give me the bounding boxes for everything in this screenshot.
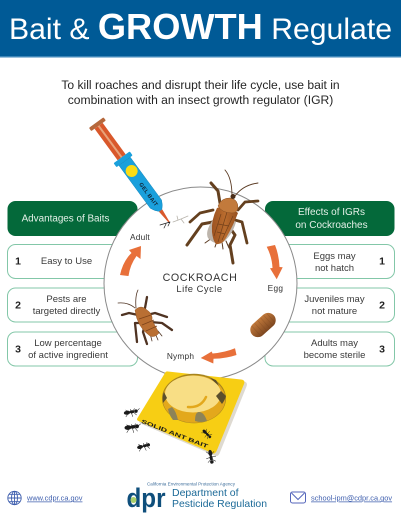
row: adults: Adults may <box>311 338 358 349</box>
heading: effects: on Cockroaches <box>295 220 368 231</box>
label: nymph: Nymph <box>167 351 194 361</box>
intro text: To kill roaches and disrupt their life cycle, use bait in <box>61 78 340 92</box>
row: pests targeted: 2 <box>15 300 21 312</box>
row: pests targeted <box>8 288 138 322</box>
row: low percentage: 3 <box>15 344 21 356</box>
row: eggs <box>265 244 394 278</box>
row: low percentage: Low percentage <box>34 338 102 349</box>
label: adult: Adult <box>130 232 150 242</box>
syringe label: GEL BAIT <box>137 182 159 208</box>
heading: effects: Effects of IGRs <box>298 207 365 218</box>
title: Bait & GROWTH Regulate <box>9 6 392 47</box>
bait label: SOLID ANT BAIT <box>140 419 210 450</box>
row: easy to use: 1 <box>15 256 21 268</box>
panel: effects of IGRs <box>265 201 394 366</box>
row: eggs: Eggs may <box>313 251 356 262</box>
row: low percentage <box>8 332 138 366</box>
header banner <box>0 0 401 58</box>
arrow: egg to nymph <box>201 348 236 364</box>
row: eggs: 1 <box>379 256 385 268</box>
heading: advantages <box>8 201 138 236</box>
footer: dpr logo: California Environmental Protection Agency <box>147 482 236 486</box>
row: juveniles: Juveniles may <box>304 294 365 305</box>
gel bait crack <box>160 216 188 228</box>
life cycle centre label: Life Cycle <box>176 283 223 294</box>
footer: dpr logo: Department of <box>172 487 239 499</box>
icon: envelope <box>290 492 306 503</box>
intro text: combination with an insect growth regulator (IGR) <box>68 93 333 107</box>
row: pests targeted: targeted directly <box>33 306 101 317</box>
label: egg: Egg <box>268 283 283 293</box>
row: adults: become sterile <box>304 350 365 361</box>
footer: dpr logo: dpr <box>126 483 166 513</box>
icon: adult cockroach <box>187 170 258 263</box>
footer: website <box>8 491 83 505</box>
icon: ants <box>124 407 217 464</box>
icon: gel bait syringe <box>88 117 178 229</box>
heading: advantages: Advantages of Baits <box>22 214 109 224</box>
row: adults: 3 <box>379 344 385 356</box>
footer: dpr logo <box>126 482 267 513</box>
icon: nymph <box>118 290 172 344</box>
heading: effects <box>265 201 394 236</box>
footer: email: school-ipm@cdpr.ca.gov <box>311 494 392 502</box>
row: eggs: not hatch <box>315 263 354 274</box>
panel: advantages of baits <box>8 201 138 366</box>
row: easy to use <box>8 244 138 278</box>
row: low percentage: of active ingredient <box>28 350 108 361</box>
row: juveniles <box>265 288 394 322</box>
icon: egg case <box>247 310 279 340</box>
arrow: adult to egg <box>267 245 283 279</box>
row: pests targeted: Pests are <box>46 294 87 305</box>
row: easy to use: Easy to Use <box>41 256 92 267</box>
arrow: nymph to adult <box>120 246 141 276</box>
row: adults <box>265 332 394 366</box>
row: juveniles: 2 <box>379 300 385 312</box>
footer: dpr logo: Pesticide Regulation <box>172 498 267 510</box>
icon: solid ant bait station <box>137 371 247 456</box>
footer: website: www.cdpr.ca.gov <box>26 494 83 502</box>
row: juveniles: not mature <box>312 306 357 317</box>
icon: globe <box>8 491 21 505</box>
life cycle circle <box>104 187 297 380</box>
icon: yellow dot <box>123 163 140 179</box>
footer: email <box>290 492 392 503</box>
life cycle centre label: COCKROACH <box>163 272 237 284</box>
